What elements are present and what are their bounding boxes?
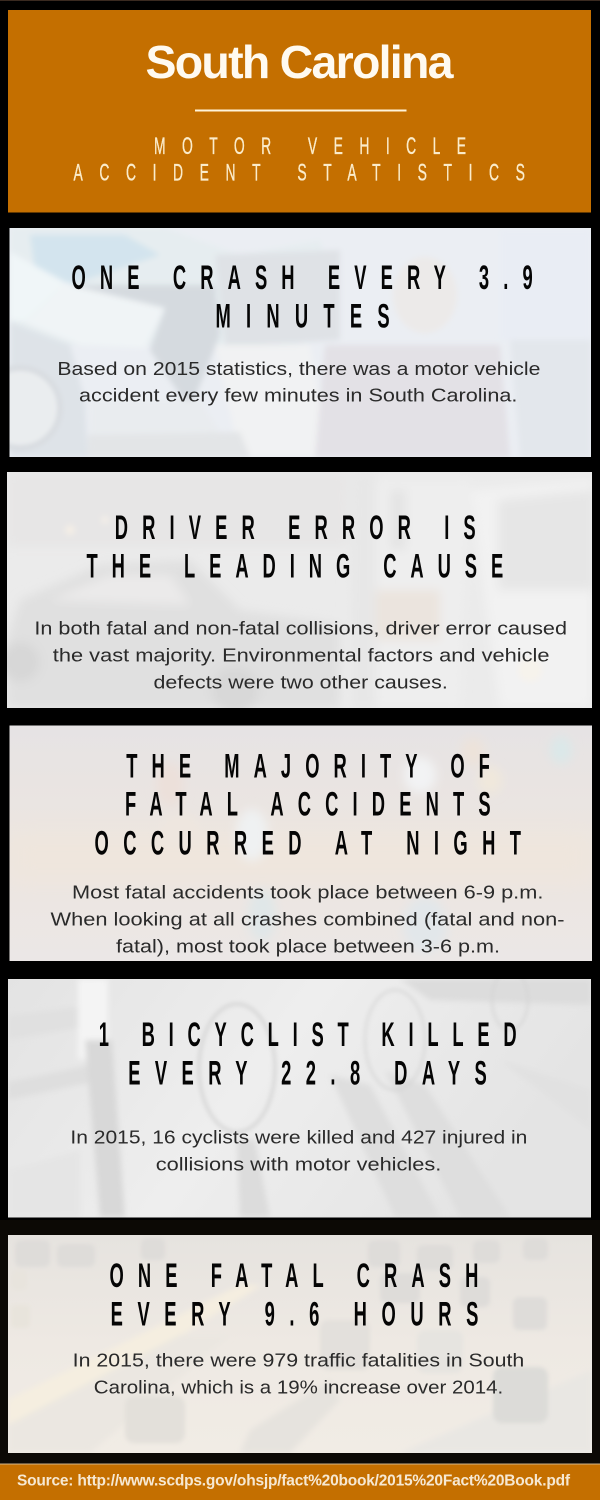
body text: the vast majority. Environmental factors and vehicle	[53, 645, 550, 666]
photo background: blurred night lights	[9, 726, 592, 961]
heading: EVERY 9.6 HOURS	[111, 1294, 478, 1333]
body text: In both fatal and non-fatal collisions, driver error caused	[34, 618, 567, 639]
title: South Carolina	[146, 36, 455, 88]
panel: one crash every 3.9 minutes	[0, 228, 592, 457]
photo background: police van and car crash	[0, 472, 592, 714]
body text: fatal), most took place between 3-6 p.m.	[116, 936, 500, 957]
panel: fatal crash	[8, 1235, 592, 1453]
heading: THE LEADING CAUSE	[86, 546, 503, 585]
heading: FATAL ACCIDENTS	[125, 785, 491, 823]
panel: header	[8, 10, 591, 212]
heading: EVERY 22.8 DAYS	[128, 1053, 487, 1092]
heading: ONE CRASH EVERY 3.9	[72, 258, 533, 296]
subtitle: ACCIDENT STATISTICS	[74, 160, 525, 187]
photo background: bicycle and shadows	[8, 970, 591, 1218]
subtitle	[74, 133, 525, 187]
body text: Based on 2015 statistics, there was a motor vehicle	[57, 358, 540, 379]
heading: ONE FATAL CRASH	[110, 1256, 478, 1294]
heading: 1 BICYCLIST KILLED	[99, 1015, 517, 1053]
heading	[72, 258, 533, 335]
body text: In 2015, 16 cyclists were killed and 427 injured in	[70, 1126, 527, 1147]
footer: source: Source: http://www.scdps.gov/ohsjp/fact%20book/2015%20Fact%20Book.pdf	[17, 1472, 571, 1490]
body text: Most fatal accidents took place between 6-9 p.m.	[72, 882, 543, 903]
heading: THE MAJORITY OF	[126, 746, 490, 785]
panel: bicyclist killed	[8, 970, 591, 1218]
heading	[99, 1015, 517, 1092]
body text: defects were two other causes.	[154, 672, 448, 693]
photo background: crashed car and driver	[0, 228, 592, 457]
body text	[34, 618, 567, 693]
body text: accident every few minutes in South Carolina.	[79, 385, 517, 406]
body text: In 2015, there were 979 traffic fatalities in South	[73, 1350, 524, 1370]
body text: collisions with motor vehicles.	[156, 1154, 441, 1174]
heading: OCCURRED AT NIGHT	[94, 823, 521, 862]
body text	[73, 1350, 524, 1398]
heading: MINUTES	[216, 297, 390, 335]
heading	[94, 746, 521, 862]
footer: source	[0, 1464, 600, 1500]
body text: When looking at all crashes combined (fatal and non-	[50, 909, 564, 930]
subtitle: MOTOR VEHICLE	[154, 133, 466, 160]
body text	[50, 882, 564, 957]
title rule	[195, 110, 406, 112]
heading: DRIVER ERROR IS	[115, 508, 476, 546]
body text: Carolina, which is a 19% increase over 2014.	[94, 1377, 503, 1398]
heading	[86, 508, 503, 585]
heading	[110, 1256, 478, 1333]
panel: driver error	[0, 472, 592, 714]
body text	[57, 358, 540, 406]
panel: fatal accidents at night	[9, 726, 592, 961]
body text	[70, 1126, 527, 1174]
photo background: highway traffic	[8, 1235, 592, 1453]
